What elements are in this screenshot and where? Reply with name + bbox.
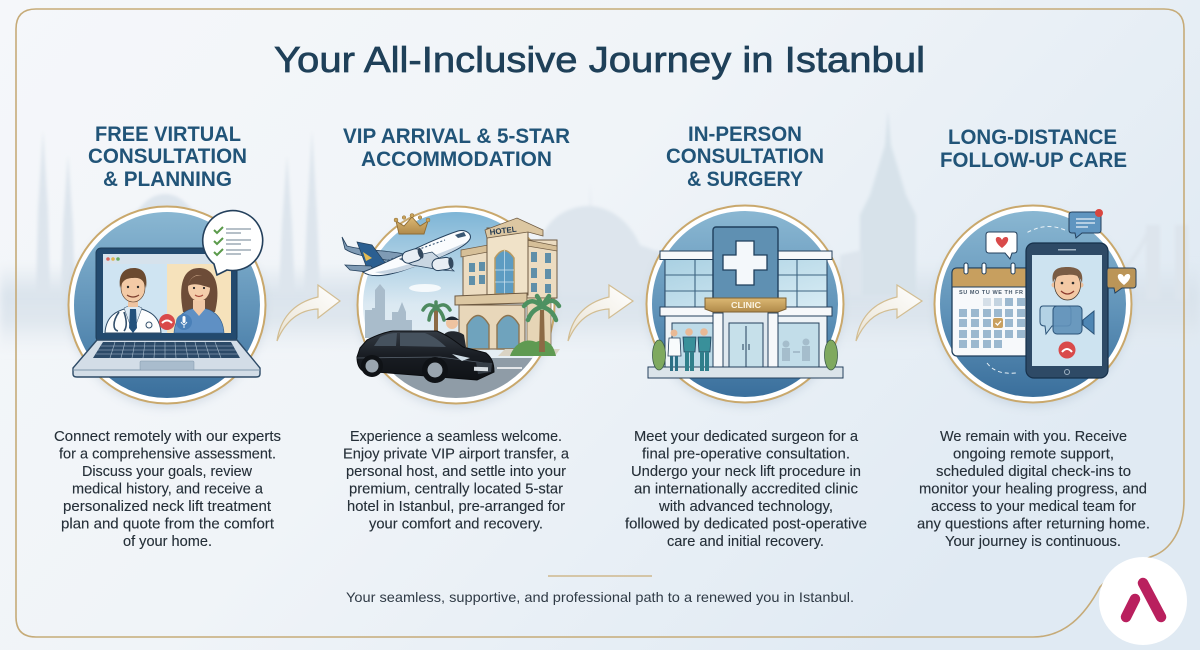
description: step 4: monitor your healing progress, and (919, 482, 1147, 498)
heading: step 2: ACCOMMODATION (361, 148, 552, 171)
description: step 2: your comfort and recovery. (369, 516, 543, 532)
heading: step 3: CONSULTATION (666, 145, 824, 168)
description: step 1 (54, 429, 281, 550)
heading: step 3: & SURGERY (687, 168, 803, 191)
logo badge (1099, 557, 1187, 645)
description: step 1: Connect remotely with our experts (54, 429, 281, 445)
heading: step 4: FOLLOW-UP CARE (940, 149, 1127, 172)
description: step 2: personal host, and settle into your (346, 464, 566, 480)
gold heart bubble (1107, 268, 1136, 293)
heading: step 1: & PLANNING (103, 168, 232, 191)
dashed follow-up arrows (987, 226, 1065, 373)
tablet (1026, 243, 1108, 378)
description: step 1: for a comprehensive assessment. (59, 446, 276, 462)
description: step 1: medical history, and receive a (72, 482, 264, 498)
airplane (342, 231, 470, 276)
description: step 3: care and initial recovery. (667, 534, 824, 550)
description: step 1: personalized neck lift treatment (63, 499, 271, 515)
step 1: free virtual consultation (54, 123, 281, 550)
patient (174, 268, 224, 333)
message bubble (1069, 209, 1103, 238)
distant skyline (365, 284, 412, 338)
description: step 3: an internationally accredited clinic (634, 482, 858, 498)
description: step 3: Undergo your neck lift procedure in (631, 464, 861, 480)
footer tagline: Your seamless, supportive, and professional path to a renewed you in Istanbul. (346, 589, 854, 605)
illustration: laptop video call (68, 206, 266, 407)
heading: step 3 (666, 123, 824, 191)
description: step 3: final pre-operative consultation. (642, 446, 850, 462)
heading: step 2: VIP ARRIVAL & 5-STAR (343, 125, 570, 148)
heading: step 1: CONSULTATION (88, 145, 247, 168)
step 4: long-distance follow-up (917, 126, 1150, 550)
hotel (455, 218, 560, 356)
description: step 3: with advanced technology, (658, 499, 833, 515)
description: step 4: any questions after returning home. (917, 516, 1150, 532)
arrow: step 3 to 4 (856, 285, 922, 341)
description: step 2: premium, centrally located 5-star (349, 482, 563, 498)
calendar (952, 263, 1030, 356)
description: step 3: followed by dedicated post-operative (625, 516, 867, 532)
crown (394, 214, 430, 234)
step 2: VIP arrival (342, 125, 570, 532)
title: Your All-Inclusive Journey in Istanbul (274, 39, 925, 80)
illustration: calendar and tablet (934, 206, 1136, 406)
illustration: clinic building (646, 206, 844, 406)
illustration: clinic building: CLINIC (731, 300, 761, 310)
description: step 2: hotel in Istanbul, pre-arranged for (347, 499, 565, 515)
palm right (524, 296, 559, 352)
description: step 2: Enjoy private VIP airport transfer, a (343, 446, 570, 462)
driver (444, 316, 466, 347)
heading: step 2 (343, 125, 570, 171)
hotel: HOTEL (489, 225, 517, 237)
description: step 1: of your home. (123, 534, 212, 550)
palm (423, 302, 450, 336)
heading: step 1: FREE VIRTUAL (95, 123, 241, 146)
description: step 3: Meet your dedicated surgeon for a (634, 429, 859, 445)
description: step 2 (343, 429, 570, 532)
description: step 4: scheduled digital check-ins to (936, 464, 1131, 480)
trees (652, 340, 838, 370)
car (357, 331, 494, 383)
doctor (105, 268, 161, 333)
heart bubble (986, 232, 1017, 259)
heading: step 4 (940, 126, 1127, 172)
step 3: in-person consultation (625, 123, 867, 550)
clinic staff (668, 328, 711, 371)
description: step 1: plan and quote from the comfort (61, 516, 274, 532)
description: step 3 (625, 429, 867, 550)
calendar: SU MO TU WE TH FR (959, 290, 1023, 296)
description: step 4: We remain with you. Receive (940, 429, 1127, 445)
illustration: plane, hotel and car (342, 206, 560, 408)
description: step 4: ongoing remote support, (953, 446, 1114, 462)
heading: step 4: LONG-DISTANCE (948, 126, 1117, 149)
arrow: step 2 to 3 (568, 285, 633, 341)
description: step 4 (917, 429, 1150, 550)
heading: step 3: IN-PERSON (688, 123, 802, 146)
description: step 1: Discuss your goals, review (82, 464, 253, 480)
description: step 2: Experience a seamless welcome. (350, 429, 562, 445)
Istanbul skyline silhouette (0, 110, 1200, 354)
arrow: step 1 to 2 (277, 285, 340, 341)
heading: step 1 (88, 123, 247, 191)
description: step 4: access to your medical team for (931, 499, 1136, 515)
description: step 4: Your journey is continuous. (945, 534, 1121, 550)
